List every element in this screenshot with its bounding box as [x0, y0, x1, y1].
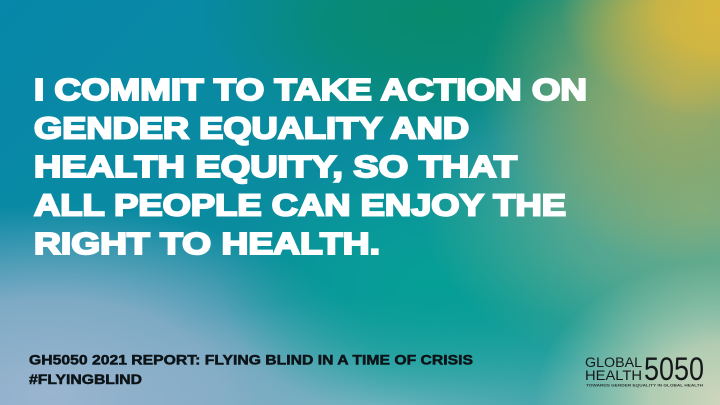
- commitment heading: I COMMIT TO TAKE ACTION ON: [34, 72, 587, 107]
- commitment heading: [34, 72, 587, 261]
- commitment heading: GENDER EQUALITY AND: [34, 110, 469, 146]
- report citation: [29, 352, 473, 387]
- logo: Global Health 5050: 5050: [644, 351, 704, 387]
- report citation: GH5050 2021 REPORT: FLYING BLIND IN A TIME OF CRISIS: [29, 352, 473, 368]
- commitment heading: HEALTH EQUITY, SO THAT: [34, 149, 517, 184]
- commitment heading: RIGHT TO HEALTH.: [34, 226, 380, 261]
- logo: Global Health 5050: HEALTH: [585, 368, 642, 383]
- logo: Global Health 5050: TOWARDS GENDER EQUALITY IN GLOBAL HEALTH: [586, 382, 703, 388]
- report citation: #FLYINGBLIND: [29, 372, 142, 387]
- logo: Global Health 5050: [585, 351, 704, 388]
- logo: Global Health 5050: GLOBAL: [585, 355, 643, 370]
- commitment heading: ALL PEOPLE CAN ENJOY THE: [34, 188, 566, 222]
